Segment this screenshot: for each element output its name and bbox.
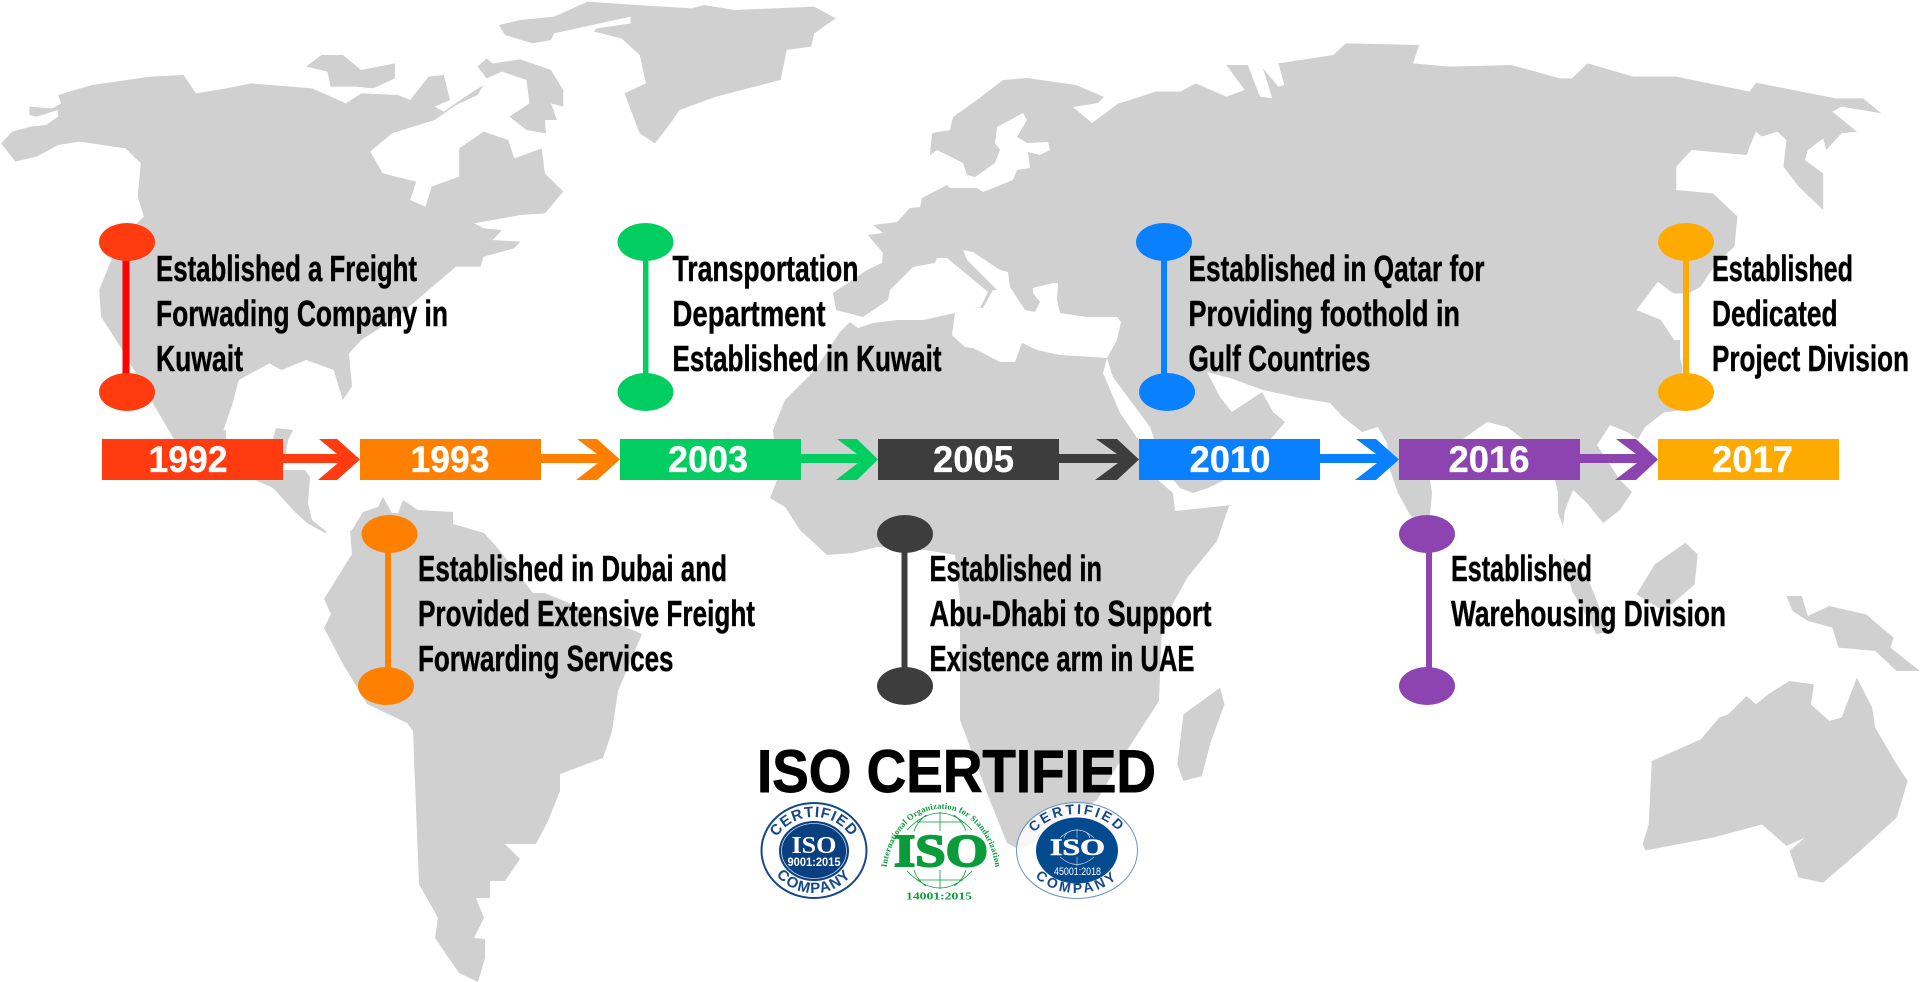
text: 2005 milestone: Abu-Dhabi to Support <box>930 593 1212 634</box>
arrow: 1993 to 2003 <box>541 439 620 480</box>
badge: ISO 14001:2015: ISO <box>894 825 988 876</box>
text: 2005 milestone: Existence arm in UAE <box>930 638 1194 679</box>
text: 2003 milestone <box>672 248 942 379</box>
heading: ISO certified: ISO CERTIFIED <box>757 738 1156 805</box>
text: 1993 milestone: Provided Extensive Freight <box>418 593 755 634</box>
year bar: 1992: 1992 <box>148 439 228 480</box>
pin: blue <box>1136 223 1195 411</box>
text: 1993 milestone <box>418 548 755 679</box>
pin: green <box>618 223 674 411</box>
year bar: 2010: 2010 <box>1190 439 1270 480</box>
text: 2005 milestone: Established in <box>930 548 1102 589</box>
arrow: 2003 to 2005 <box>801 439 878 480</box>
arrow: 2016 to 2017 <box>1580 439 1658 480</box>
text: 2016 milestone: Warehousing Division <box>1451 593 1726 634</box>
map: Central America <box>174 428 327 533</box>
map: South America <box>324 497 642 982</box>
text: 1993 milestone: Established in Dubai and <box>418 548 727 589</box>
map: Europe <box>833 78 1240 377</box>
text: 2010 milestone: Providing foothold in <box>1188 293 1460 334</box>
year bar: 2003: 2003 <box>668 439 748 480</box>
text: 2017 milestone <box>1712 248 1909 379</box>
text: 1993 milestone: Forwarding Services <box>418 638 674 679</box>
year bar: 2003 <box>620 439 801 480</box>
pin: red <box>99 223 155 411</box>
badge: ISO 9001:2015: COMPANY <box>778 869 848 894</box>
text: 2016 milestone <box>1451 548 1726 634</box>
year bar: 1993 <box>360 439 541 480</box>
badge: ISO 14001:2015 <box>881 803 1000 902</box>
arrow: 2005 to 2010 <box>1059 439 1139 480</box>
badge: ISO 45001:2018: CERTIFIED <box>1029 804 1123 830</box>
pin: purple <box>1399 515 1455 705</box>
text: 2003 milestone: Department <box>672 293 826 334</box>
milestone: 1992 <box>99 223 448 411</box>
badge: ISO 14001:2015: International Organization for Standarization <box>881 803 1000 868</box>
text: 2010 milestone <box>1188 248 1484 379</box>
milestone: 2016 <box>1399 515 1726 705</box>
year bar: 2016: 2016 <box>1448 439 1530 480</box>
text: 1992 milestone <box>156 248 448 379</box>
year bar: 2016 <box>1399 439 1580 480</box>
badge: ISO 14001:2015: 14001:2015 <box>906 890 973 902</box>
milestone: 2010 <box>1136 223 1484 411</box>
badge: ISO 45001:2018: 45001:2018 <box>1054 866 1101 878</box>
text: 1992 milestone: Forwading Company in <box>156 293 448 334</box>
badge: ISO 9001:2015: ISO <box>792 833 836 859</box>
milestone: 2017 <box>1658 223 1909 411</box>
year bar: 1993: 1993 <box>410 439 490 480</box>
pin: orange <box>358 515 418 705</box>
year bar: 2005: 2005 <box>933 439 1014 480</box>
badge: ISO 9001:2015 <box>760 802 868 899</box>
pin: amber <box>1658 223 1714 411</box>
map: southern Asia <box>1107 340 1680 526</box>
year bar: 2017 <box>1658 439 1839 480</box>
text: 2017 milestone: Dedicated <box>1712 293 1838 334</box>
arrow: 1992 to 1993 <box>283 439 360 480</box>
badge: ISO 9001:2015: 9001:2015 <box>788 857 841 869</box>
map: Indonesia, Madagascar and Australia <box>1177 543 1920 883</box>
badge: ISO 45001:2018: COMPANY <box>1037 872 1114 894</box>
milestone: 2003 <box>618 223 942 411</box>
milestone: 2005 <box>877 515 1212 705</box>
badge: ISO 45001:2018 <box>1016 802 1138 899</box>
text: 2005 milestone <box>930 548 1212 679</box>
map: northern Asia <box>1119 43 1881 417</box>
badge: ISO 45001:2018: ISO <box>1050 835 1105 860</box>
map: Africa <box>770 313 1232 848</box>
text: 2010 milestone: Established in Qatar for <box>1188 248 1484 289</box>
timeline: year bars and arrows <box>102 439 1839 480</box>
text: 2017 milestone: Established <box>1712 248 1853 289</box>
text: 2010 milestone: Gulf Countries <box>1188 338 1370 379</box>
badge: ISO 9001:2015: CERTIFIED <box>770 806 856 835</box>
year bar: 2017: 2017 <box>1712 439 1793 480</box>
year bar: 2005 <box>878 439 1059 480</box>
text: 2016 milestone: Established <box>1451 548 1592 589</box>
text: 2003 milestone: Established in Kuwait <box>672 338 942 379</box>
year bar: 2010 <box>1139 439 1320 480</box>
pin: dark grey <box>877 515 933 705</box>
map: North America <box>1 2 836 440</box>
milestone: 1993 <box>358 515 755 705</box>
text: 1992 milestone: Established a Freight <box>156 248 417 289</box>
text: 2003 milestone: Transportation <box>672 248 858 289</box>
text: 1992 milestone: Kuwait <box>156 338 243 379</box>
arrow: 2010 to 2016 <box>1320 439 1399 480</box>
year bar: 1992 <box>102 439 283 480</box>
